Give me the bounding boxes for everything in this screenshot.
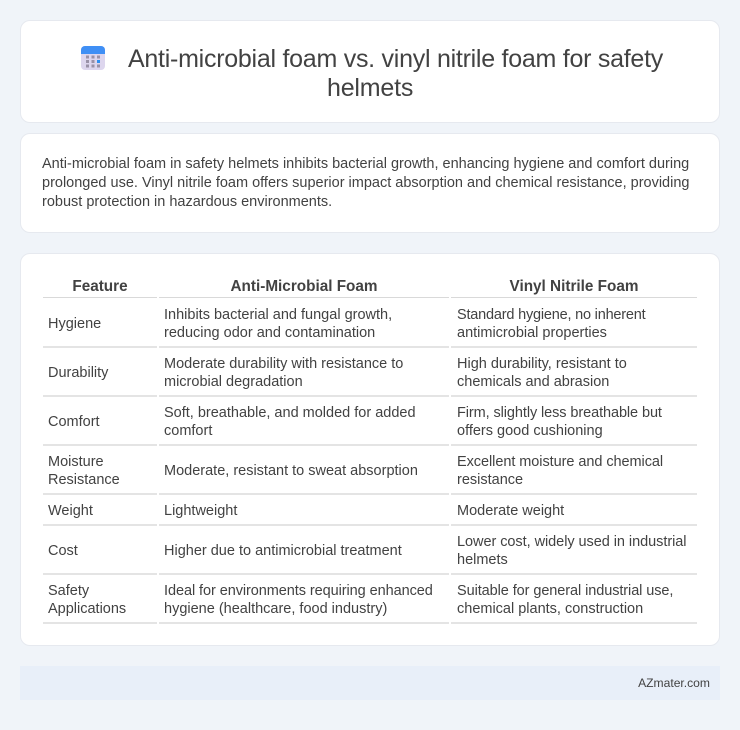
title: helmets xyxy=(327,74,413,102)
title: Anti-microbial foam vs. vinyl nitrile foam for safety xyxy=(128,45,663,73)
table header: vinyl nitrile foam: Vinyl Nitrile Foam xyxy=(510,278,638,295)
table header: feature: Feature xyxy=(72,278,128,295)
row: comfort xyxy=(48,405,662,439)
row: cost: Lower cost, widely used in industrial xyxy=(457,534,686,550)
row: safety applications: hygiene (healthcare, food industry) xyxy=(164,601,387,617)
row: durability: chemicals and abrasion xyxy=(457,374,609,390)
row: cost: helmets xyxy=(457,552,508,568)
row: moisture resistance: Moderate, resistant to sweat absorption xyxy=(164,463,418,479)
row: moisture resistance xyxy=(48,454,663,488)
header panel xyxy=(20,20,720,123)
title xyxy=(128,45,664,102)
row: weight: Lightweight xyxy=(164,503,237,519)
icon: calendar xyxy=(81,46,105,70)
row: comfort: Soft, breathable, and molded for added xyxy=(164,405,416,421)
intro text xyxy=(42,156,689,210)
row: hygiene: Hygiene xyxy=(48,316,101,332)
row: durability xyxy=(48,356,627,390)
row: weight: Weight xyxy=(48,503,93,519)
intro text: robust protection in hazardous environments. xyxy=(42,194,332,210)
row: hygiene: Inhibits bacterial and fungal growth, xyxy=(164,307,392,323)
row: cost xyxy=(48,534,686,568)
footer credit: AZmater.com xyxy=(638,676,710,690)
row: safety applications: Applications xyxy=(48,601,126,617)
row: moisture resistance: Excellent moisture and chemical xyxy=(457,454,663,470)
row: weight xyxy=(48,503,564,519)
row: safety applications: Suitable for general industrial use, xyxy=(457,583,673,599)
row: comfort: offers good cushioning xyxy=(457,423,603,439)
row: durability: Durability xyxy=(48,365,108,381)
footer bar xyxy=(20,666,720,700)
row: moisture resistance: Resistance xyxy=(48,472,120,488)
row: hygiene: antimicrobial properties xyxy=(457,325,607,341)
row: cost: Higher due to antimicrobial treatment xyxy=(164,543,402,559)
intro text: prolonged use. Vinyl nitrile foam offers superior impact absorption and chemical resistance, providing xyxy=(42,175,689,191)
row: comfort: comfort xyxy=(164,423,212,439)
row: safety applications xyxy=(48,583,673,617)
panel: comparison table xyxy=(20,253,720,646)
row: comfort: Comfort xyxy=(48,414,100,430)
row: durability: Moderate durability with resistance to xyxy=(164,356,403,372)
table header: anti-microbial foam: Anti-Microbial Foam xyxy=(230,278,378,295)
row: hygiene: Standard hygiene, no inherent xyxy=(457,307,646,323)
row: safety applications: Safety xyxy=(48,583,89,599)
row: moisture resistance: resistance xyxy=(457,472,523,488)
intro panel xyxy=(20,133,720,233)
row: hygiene xyxy=(48,307,646,341)
row: cost: Cost xyxy=(48,543,78,559)
row: safety applications: chemical plants, construction xyxy=(457,601,643,617)
row: moisture resistance: Moisture xyxy=(48,454,104,470)
intro text: Anti-microbial foam in safety helmets inhibits bacterial growth, enhancing hygiene and comfort during xyxy=(42,156,689,172)
row: safety applications: Ideal for environments requiring enhanced xyxy=(164,583,433,599)
row: comfort: Firm, slightly less breathable but xyxy=(457,405,662,421)
row: weight: Moderate weight xyxy=(457,503,564,519)
row: durability: High durability, resistant to xyxy=(457,356,627,372)
row: durability: microbial degradation xyxy=(164,374,303,390)
row: hygiene: reducing odor and contamination xyxy=(164,325,375,341)
